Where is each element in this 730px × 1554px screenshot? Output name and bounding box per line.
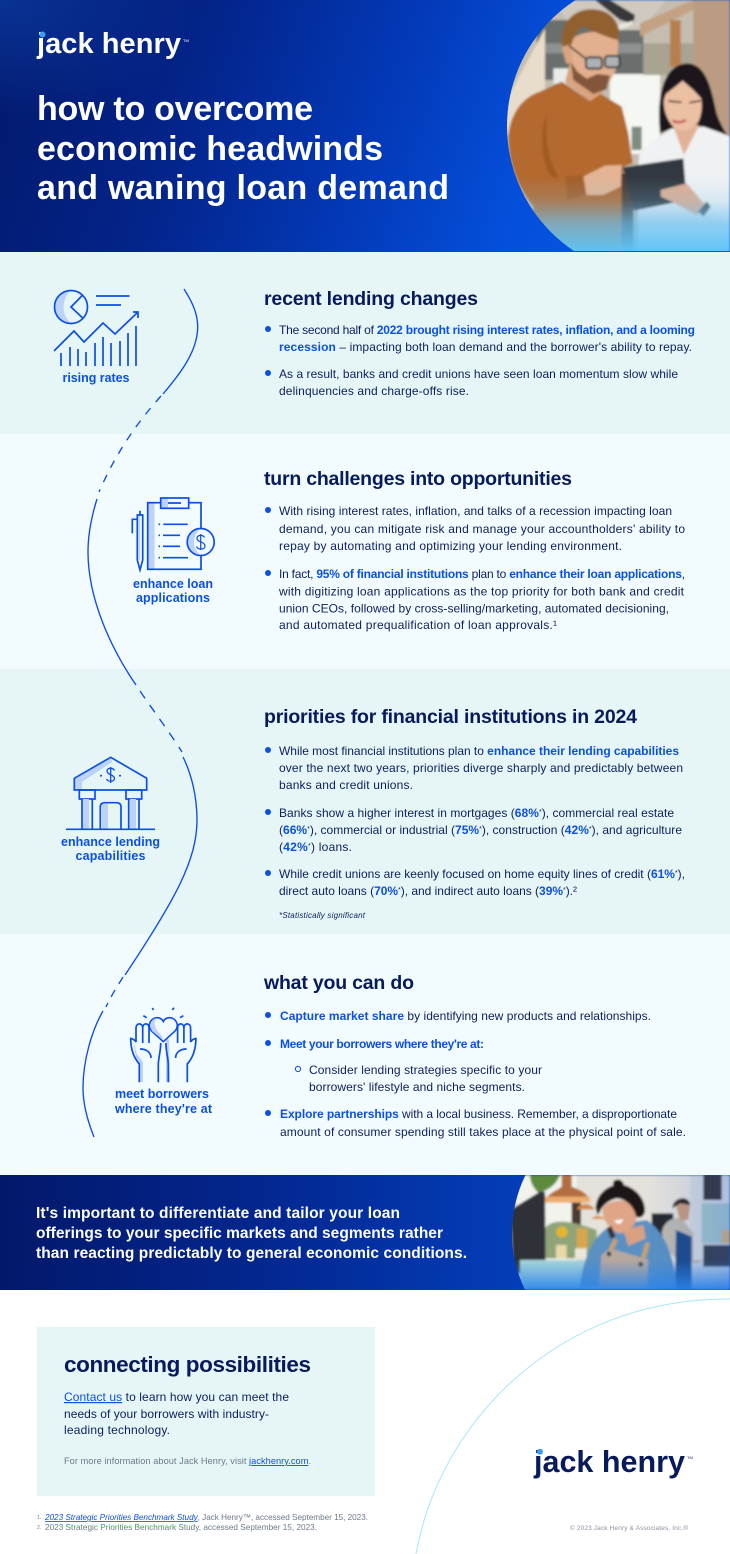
logo: jack henry navy: TM	[687, 1455, 693, 1460]
label: enhance loan applications: applications	[136, 591, 210, 605]
icon: rising rates chart	[54, 290, 138, 366]
bullet list: priorities: *	[563, 887, 566, 894]
bullet list: priorities: *	[589, 826, 592, 833]
bullet list: opportunities: with digitizing loan applications as the top priority for both bank and credit	[278, 584, 685, 598]
decorative light arc	[416, 1299, 730, 1554]
bullet list: actions: amount of consumer spending still takes place at the physical point of sale.	[280, 1125, 686, 1139]
bullet list: priorities: (42%	[279, 840, 308, 854]
wavy dashed path connecting sections	[83, 289, 198, 1137]
title: and waning loan demand	[37, 169, 449, 207]
callout text: than reacting predictably to general economic conditions.	[36, 1245, 467, 1262]
logo: jack henry navy: jack henry	[533, 1445, 685, 1479]
bullet list: priorities: direct auto loans (70%	[279, 884, 398, 898]
panel: priorities for financial institutions in 2024	[0, 669, 730, 934]
copyright: © 2023 Jack Henry & Associates, Inc.®	[570, 1524, 688, 1532]
text: contact invitation: Contact us to learn how you can meet the	[64, 1390, 289, 1404]
bullet list: priorities: *	[539, 809, 542, 816]
bullet list: actions: Meet your borrowers where they're at:	[280, 1037, 484, 1051]
bullet list: lending changes: delinquencies and charge-offs rise.	[279, 384, 469, 398]
bullet list: opportunities: demand, you can mitigate risk and manage your accountholders' ability to	[279, 522, 685, 536]
bullet list: actions: Capture market share by identifying new products and relationships.	[280, 1009, 651, 1023]
icon: clipboard, pen and dollar coin	[132, 498, 214, 570]
label: enhance lending capabilities: capabilities	[76, 849, 146, 863]
icon: bank building	[66, 757, 155, 829]
bullet list: opportunities: In fact, 95% of financial institutions plan to enhance their loan applications,	[279, 567, 685, 581]
bullet list: priorities: *	[398, 887, 401, 894]
label: meet borrowers where they're at	[114, 1087, 213, 1116]
bullet list: lending changes	[265, 323, 695, 398]
label: enhance loan applications: enhance loan	[133, 577, 213, 591]
bullet list: priorities: *	[479, 826, 482, 833]
heading: connecting possibilities: connecting possibilities	[64, 1352, 311, 1377]
panel: what you can do	[0, 934, 730, 1175]
bullet list: lending changes: The second half of 2022 brought rising interest rates, inflation, and a looming	[279, 323, 695, 337]
footnotes	[37, 1513, 368, 1532]
bullet list: opportunities: and automated prequalification of loan approvals.¹	[279, 618, 557, 632]
bullet list: opportunities: repay by automating and optimizing your lending environment.	[279, 539, 622, 553]
bullet list: priorities: ),	[678, 867, 685, 881]
bullet list: actions: Explore partnerships with a local business. Remember, a disproportionate	[280, 1107, 677, 1121]
bullet list: priorities: ), construction (	[482, 823, 565, 837]
panel: connecting possibilities call to action	[37, 1327, 375, 1496]
label: rising rates: rising rates	[62, 371, 130, 385]
text: contact invitation: leading technology.	[64, 1423, 170, 1437]
icon: hands holding a heart	[131, 1008, 196, 1082]
text: contact invitation	[64, 1390, 289, 1437]
label: enhance loan applications	[133, 577, 213, 605]
bullet list: priorities: ), commercial or industrial (	[310, 823, 455, 837]
title	[37, 90, 449, 207]
bullet list: lending changes: As a result, banks and credit unions have seen loan momentum slow while	[279, 367, 678, 381]
panel: header banner	[0, 0, 730, 253]
bullet list: priorities: over the next two years, priorities diverge sharply and predictably between	[279, 761, 683, 775]
bullet list: lending changes: recession – impacting both loan demand and the borrower's ability to repay.	[279, 340, 692, 354]
bullet list: priorities: ), commercial real estate	[542, 806, 674, 820]
title: economic headwinds	[37, 130, 383, 168]
footnotes: 1.	[37, 1515, 41, 1521]
text: more information: For more information about Jack Henry, visit jackhenry.com.	[64, 1456, 311, 1466]
photo: smiling cafe owner on the phone	[510, 1175, 730, 1290]
bullet list: opportunities: union CEOs, followed by cross-selling/marketing, automated decisioning,	[279, 602, 669, 616]
bullet list: opportunities: With rising interest rates, inflation, and talks of a recession impacting loan	[279, 504, 672, 518]
callout text: offerings to your specific markets and segments rather	[36, 1225, 443, 1242]
logo: jack henry white: jack henry	[36, 28, 181, 60]
heading: turn challenges into opportunities: turn challenges into opportunities	[264, 468, 572, 490]
panel: turn challenges into opportunities	[0, 434, 730, 669]
bullet list: priorities: 42%	[565, 823, 589, 837]
heading: priorities for financial institutions in 2024: priorities for financial institutions in 2024	[264, 706, 637, 728]
bullet list: priorities: *	[307, 826, 310, 833]
footnote: statistically significant: *Statistically significant	[279, 911, 366, 920]
bullet list: priorities: (66%	[279, 823, 307, 837]
callout text	[36, 1205, 467, 1262]
footnotes: 2023 Strategic Priorities Benchmark Study, accessed September 15, 2023.	[45, 1523, 317, 1532]
title: how to overcome	[37, 90, 313, 128]
panel: differentiation banner	[0, 1175, 730, 1290]
bullet list: priorities: Banks show a higher interest in mortgages (68%	[279, 806, 539, 820]
bullet list: priorities: *	[675, 870, 678, 877]
panel: recent lending changes	[0, 252, 730, 434]
bullet list: priorities: 75%	[455, 823, 479, 837]
text: contact invitation: needs of your borrowers with industry-	[64, 1407, 269, 1421]
label: meet borrowers where they're at: meet borrowers	[115, 1087, 209, 1101]
label: meet borrowers where they're at: where they're at	[114, 1102, 213, 1116]
label: enhance lending capabilities: enhance lending	[61, 835, 160, 849]
bullet list: priorities	[265, 744, 685, 898]
heading: recent lending changes: recent lending changes	[264, 288, 478, 310]
bullet list: priorities: ) loans.	[311, 840, 352, 854]
bullet list: opportunities	[265, 504, 685, 632]
label: enhance lending capabilities	[61, 835, 160, 863]
bullet list: actions: Consider lending strategies specific to your	[309, 1063, 542, 1077]
logo: jack henry white: TM	[183, 38, 189, 43]
bullet list: actions: borrowers' lifestyle and niche segments.	[309, 1080, 525, 1094]
bullet list: priorities: ), and indirect auto loans (	[401, 884, 539, 898]
footnotes: 2.	[37, 1525, 41, 1531]
bullet list: priorities: 39%	[539, 884, 563, 898]
bullet list: priorities: *	[308, 843, 311, 850]
heading: what you can do: what you can do	[263, 972, 414, 994]
photo: two colleagues looking at a tablet	[490, 0, 730, 253]
bullet list: priorities: ).²	[566, 884, 577, 898]
footnotes: 2023 Strategic Priorities Benchmark Study, Jack Henry™, accessed September 15, 2023.	[44, 1513, 368, 1522]
callout text: It's important to differentiate and tailor your loan	[36, 1205, 400, 1222]
bullet list: priorities: While credit unions are keenly focused on home equity lines of credit (61%	[279, 867, 675, 881]
bullet list: priorities: ), and agriculture	[592, 823, 682, 837]
bullet list: actions	[265, 1009, 686, 1139]
bullet list: priorities: banks and credit unions.	[279, 778, 413, 792]
bullet list: priorities: While most financial institutions plan to enhance their lending capabilities	[279, 744, 679, 758]
